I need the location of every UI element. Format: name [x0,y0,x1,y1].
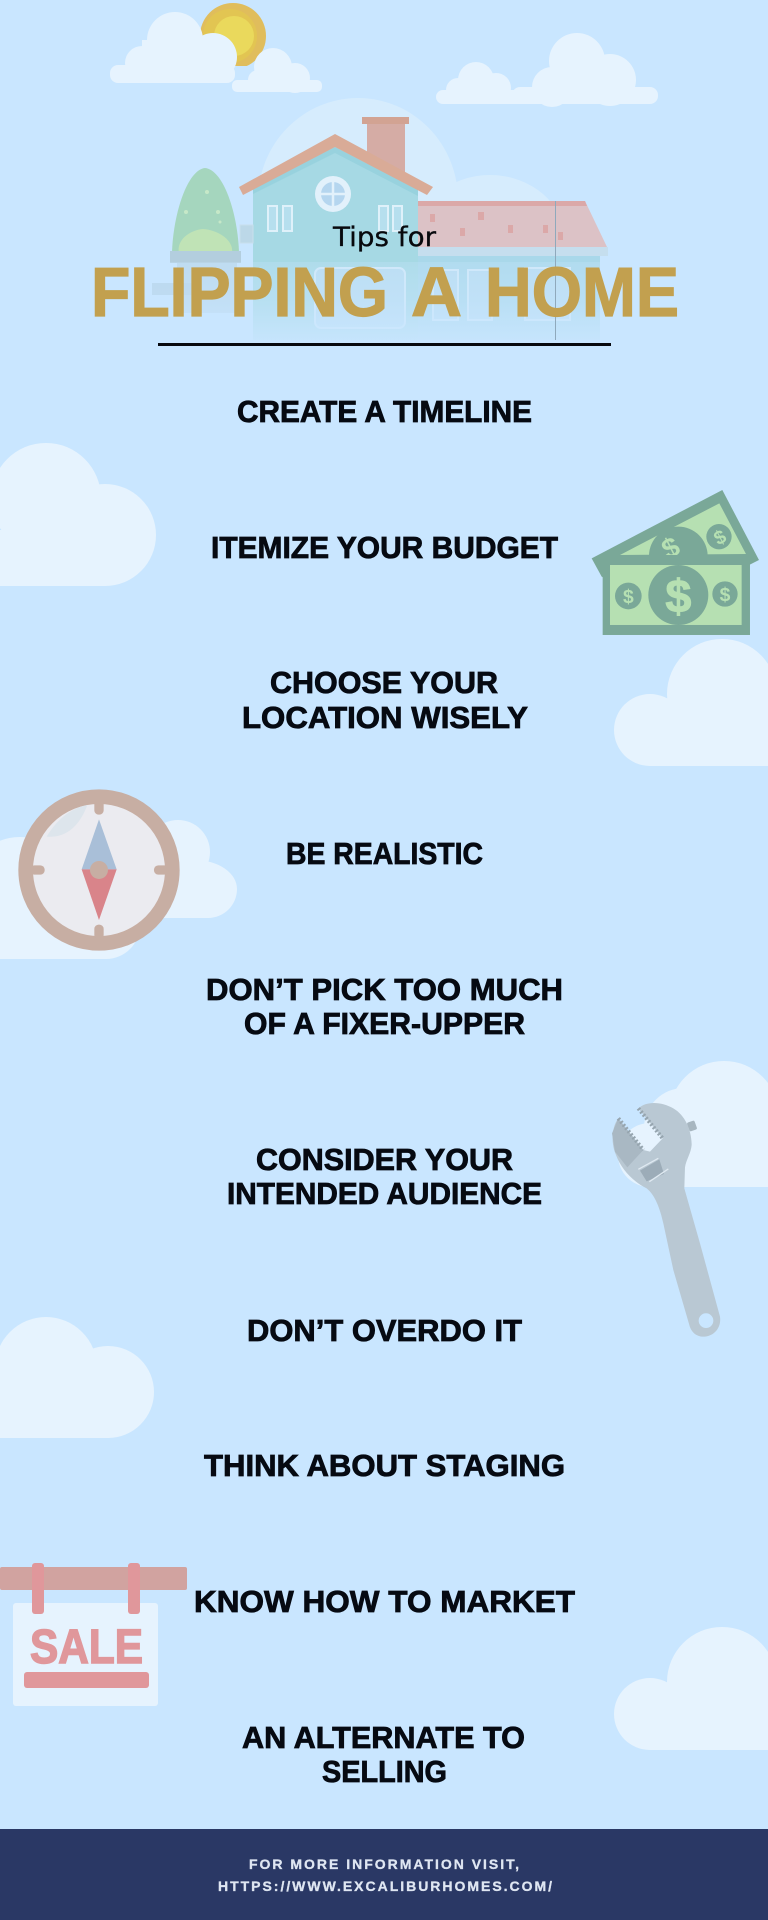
footer text: HTTPS://WWW.EXCALIBURHOMES.COM/ [218,1878,552,1894]
round attic window [315,176,351,212]
right wing wall [418,256,600,340]
cloud: left upper [0,443,156,586]
tip: choose your location wisely: CHOOSE YOUR [270,665,498,700]
upper windows [268,206,402,231]
icon: compass [26,797,172,943]
title underline [158,343,611,346]
cloud: top right large [512,33,658,107]
title: HOME [485,253,679,331]
cloud: top right small [436,62,526,104]
tip: don't overdo it: DON’T OVERDO IT [247,1313,522,1348]
icon: money bills [592,490,759,635]
tip: consider your intended audience: CONSIDER YOUR [256,1142,513,1177]
footer text: FOR MORE INFORMATION VISIT, [249,1856,519,1872]
cloud: behind wrench [618,1061,768,1187]
icon: sale sign [0,1563,187,1706]
tree [152,168,241,313]
footer text [218,1856,552,1894]
tip: don't pick too much of a fixer-upper: OF A FIXER-UPPER [244,1006,525,1041]
tip: know how to market: KNOW HOW TO MARKET [194,1584,575,1619]
front bill: $ [665,570,691,622]
cloud: top left small [232,48,322,93]
tip: consider your intended audience: INTENDED AUDIENCE [227,1176,542,1211]
backdrop cloud behind house [258,98,565,305]
cloud: top left large [110,12,237,83]
lower windows and door [315,268,570,328]
icon: sun [200,3,266,69]
icon: wrench [612,1103,720,1337]
title: FLIPPING [91,253,388,331]
footer band [0,1829,768,1920]
cloud: right upper [614,639,768,766]
tip: choose your location wisely: LOCATION WISELY [242,700,528,735]
front bill: $ [623,587,634,608]
roof ridge and tiles [418,201,587,240]
main gable wall [253,147,418,340]
tip: an alternate to selling: AN ALTERNATE TO [242,1720,525,1755]
back bill: $ [657,531,685,566]
subtitle: Tips for [332,222,436,253]
gable roof [239,134,433,195]
tip: create a timeline: CREATE A TIMELINE [237,394,532,429]
title [91,253,679,331]
cloud: left lower [0,1317,154,1438]
back bill: $ [711,526,730,550]
tip: choose your location wisely [242,665,528,735]
right wing band [418,247,608,256]
tip: an alternate to selling [242,1720,525,1789]
front bill [603,555,750,635]
cloud: right lower [614,1627,768,1750]
right wing roof [418,201,607,247]
seam line [555,201,556,340]
cloud: behind compass [0,820,237,959]
tip: an alternate to selling: SELLING [322,1754,447,1789]
icon: sale sign: SALE [30,1621,143,1674]
tip: don't pick too much of a fixer-upper [206,972,563,1041]
tip: be realistic: BE REALISTIC [286,836,483,871]
side flag panel [240,225,253,243]
back bill [592,490,759,578]
fade over house base [150,262,610,342]
illustration: house [150,98,610,342]
tip: itemize your budget: ITEMIZE YOUR BUDGET [211,530,558,565]
chimney [362,117,409,179]
gable inner band [253,147,418,196]
tip: don't pick too much of a fixer-upper: DON’T PICK TOO MUCH [206,972,563,1007]
tip: think about staging: THINK ABOUT STAGING [204,1448,565,1483]
title: A [411,253,462,331]
tip: consider your intended audience [227,1142,542,1211]
front bill: $ [720,585,731,606]
